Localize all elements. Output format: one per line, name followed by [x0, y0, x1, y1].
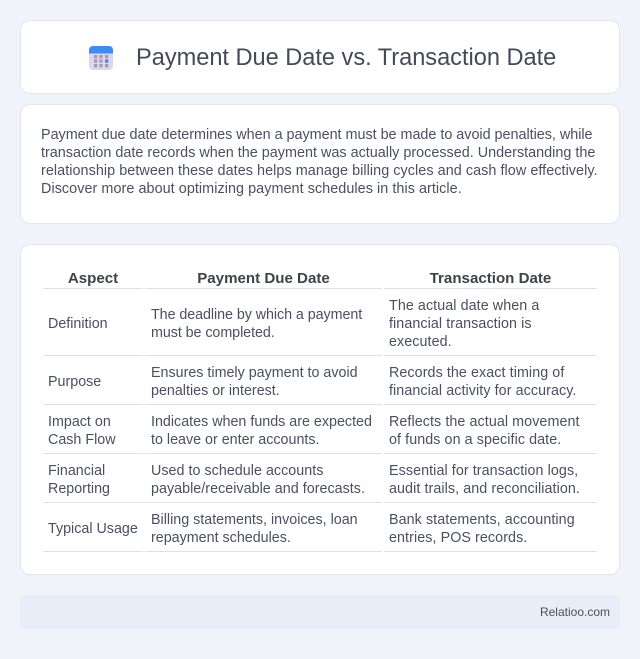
intro text: transaction date records when the payment was actually processed. Understanding the [41, 144, 595, 160]
usage: payment due date: repayment schedules. [151, 530, 291, 546]
definition: transaction date: financial transaction is [389, 316, 532, 332]
purpose: payment due date [151, 365, 358, 399]
row: purpose: Purpose [48, 374, 101, 390]
header: payment due date: Payment Due Date [197, 270, 330, 286]
impact: transaction date [389, 414, 580, 448]
impact: transaction date: Reflects the actual movement [389, 414, 580, 430]
usage: transaction date: Bank statements, accounting [389, 512, 575, 528]
purpose: payment due date: penalties or interest. [151, 383, 280, 399]
purpose: transaction date: financial activity for accuracy. [389, 383, 576, 399]
purpose: transaction date: Records the exact timing of [389, 365, 564, 381]
row: financial reporting [48, 463, 110, 497]
impact: payment due date [151, 414, 372, 448]
reporting: payment due date [151, 463, 365, 497]
definition: payment due date: The deadline by which a payment [151, 307, 362, 323]
purpose: transaction date [389, 365, 576, 399]
intro text: Payment due date determines when a payment must be made to avoid penalties, while [41, 126, 593, 142]
icon: calendar [89, 46, 113, 70]
usage: transaction date [389, 512, 575, 546]
header: transaction date: Transaction Date [430, 270, 551, 286]
intro card [20, 104, 620, 224]
impact: transaction date: of funds on a specific date. [389, 432, 561, 448]
row: financial reporting: Reporting [48, 481, 110, 497]
header: aspect: Aspect [68, 270, 118, 286]
usage: payment due date [151, 512, 358, 546]
purpose: payment due date: Ensures timely payment to avoid [151, 365, 358, 381]
intro text [41, 126, 598, 196]
row: impact on cash flow [48, 414, 116, 448]
definition: payment due date [151, 307, 362, 341]
impact: payment due date: to leave or enter accounts. [151, 432, 319, 448]
intro text: Discover more about optimizing payment schedules in this article. [41, 180, 462, 196]
reporting: transaction date [389, 463, 580, 497]
usage: transaction date: entries, POS records. [389, 530, 527, 546]
definition: transaction date [389, 298, 540, 350]
reporting: transaction date: Essential for transaction logs, [389, 463, 578, 479]
row: impact on cash flow: Cash Flow [48, 432, 116, 448]
reporting: payment due date: Used to schedule accounts [151, 463, 323, 479]
title card [20, 20, 620, 94]
definition: payment due date: must be completed. [151, 325, 275, 341]
footer bar [20, 595, 620, 629]
intro text: relationship between these dates helps manage billing cycles and cash flow effectively. [41, 162, 598, 178]
usage: payment due date: Billing statements, invoices, loan [151, 512, 358, 528]
impact: payment due date: Indicates when funds are expected [151, 414, 372, 430]
row: typical usage: Typical Usage [48, 521, 138, 537]
reporting: payment due date: payable/receivable and forecasts. [151, 481, 365, 497]
reporting: transaction date: audit trails, and reconciliation. [389, 481, 580, 497]
footer credit: Relatioo.com [540, 605, 610, 619]
row: definition: Definition [48, 316, 108, 332]
definition: transaction date: The actual date when a [389, 298, 539, 314]
row: financial reporting: Financial [48, 463, 105, 479]
row: impact on cash flow: Impact on [48, 414, 111, 430]
title: Payment Due Date vs. Transaction Date [136, 45, 556, 71]
definition: transaction date: executed. [389, 334, 452, 350]
comparison table card [20, 244, 620, 575]
